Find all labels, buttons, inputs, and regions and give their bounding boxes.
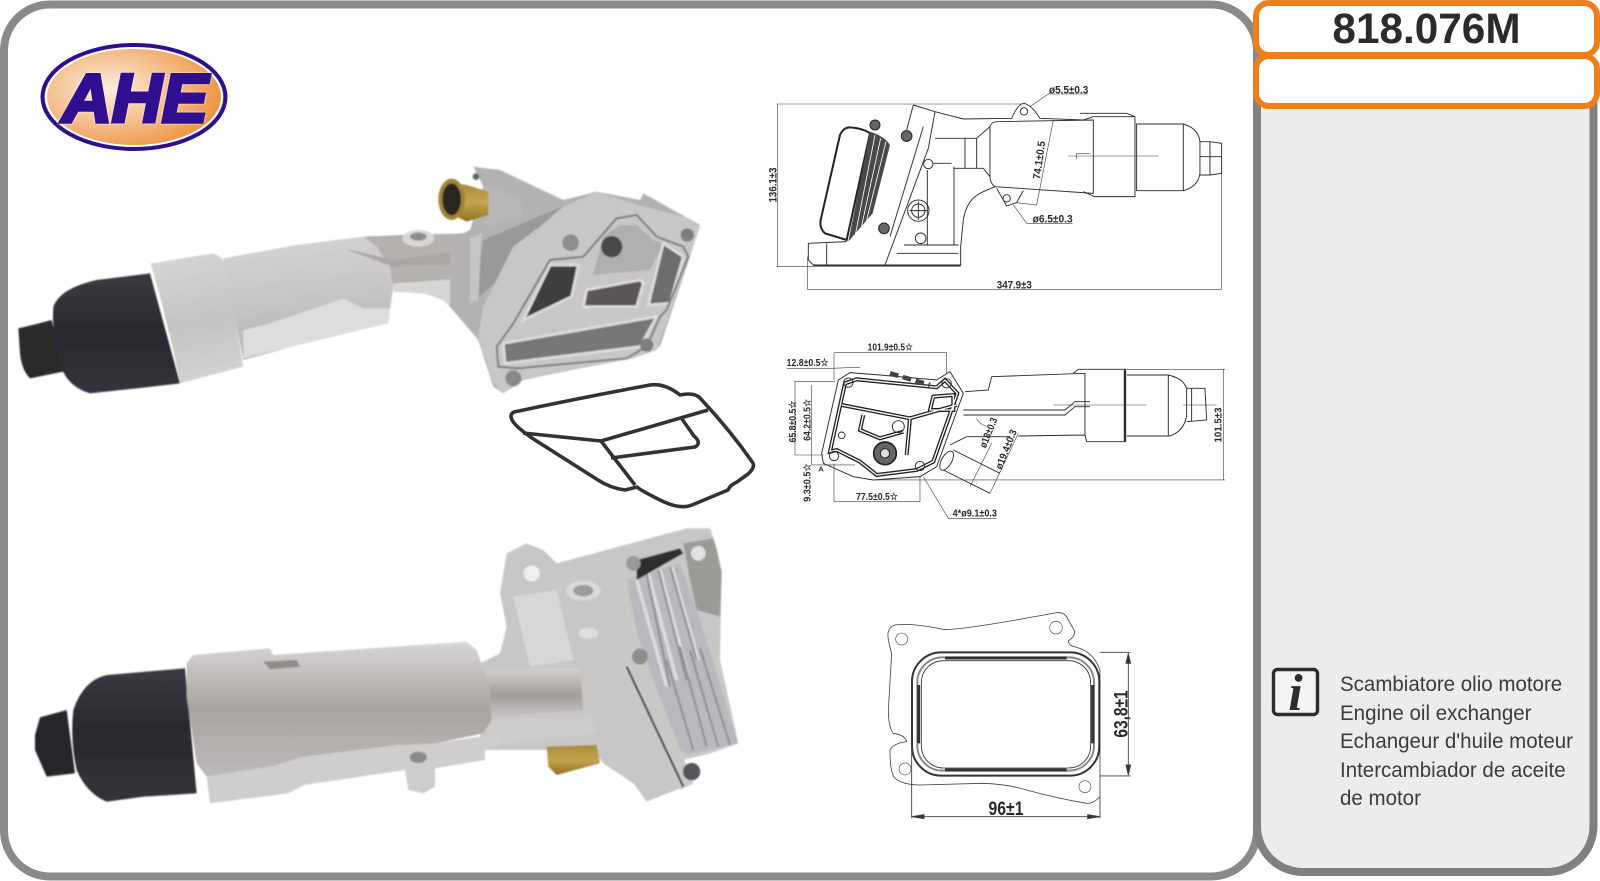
- dimension labels: ø18±0.3: [978, 416, 1000, 450]
- text block: part description: Engine oil exchanger: [1340, 702, 1531, 725]
- part number box: 818.076M: [1332, 5, 1521, 52]
- text block: part description: [1340, 673, 1573, 810]
- dimension lines: [787, 353, 1225, 518]
- dimension labels: [768, 84, 1088, 291]
- text block: part description: Intercambiador de aceite: [1340, 759, 1566, 782]
- dimension labels: 101.9±0.5☆: [868, 343, 913, 354]
- icon: information: [1274, 665, 1318, 722]
- cap and housing: [35, 642, 500, 803]
- diagram: cooler plate with dimensions: [888, 613, 1132, 820]
- panel: details: [1257, 60, 1594, 872]
- brass tube and mounting flange: [438, 167, 700, 393]
- dimension labels: 96±1: [988, 799, 1024, 820]
- cap and housing: [18, 230, 510, 393]
- photo: oil filter housing, flange side: [18, 230, 510, 393]
- text block: part description: Scambiatore olio motore: [1340, 673, 1562, 696]
- empty orange box: [1256, 56, 1597, 106]
- housing outline: [808, 103, 1222, 266]
- flange plate with gasket groove: [822, 372, 963, 480]
- part number box: [1256, 3, 1597, 55]
- photo: oil filter housing, cooler side: [35, 528, 738, 803]
- dimension labels: [787, 343, 1225, 520]
- dimension labels: 9.3±0.5☆: [803, 463, 814, 502]
- dimension labels: ø6.5±0.3: [1033, 214, 1073, 226]
- dimension labels: [988, 690, 1132, 820]
- housing outline: [937, 369, 1207, 493]
- dimension labels: 65.8±0.5☆: [788, 401, 799, 442]
- diagram: side view with dimensions: [768, 84, 1222, 291]
- dimension lines: [912, 652, 1131, 819]
- dimension labels: 77.5±0.5☆: [856, 492, 898, 503]
- dimension labels: 63,8±1: [1111, 690, 1132, 738]
- gasket: [511, 385, 753, 507]
- diagram: flange view with dimensions: [787, 343, 1225, 520]
- icon: information: i: [1288, 665, 1303, 722]
- dimension labels: 136.1±3: [768, 167, 780, 202]
- dimension labels: 64.2±0.5☆: [803, 399, 814, 441]
- dimension labels: ø19.4±0.3: [994, 428, 1020, 471]
- dimension labels: 4*ø9.1±0.3: [953, 509, 997, 520]
- mounting bracket, cooler and brass port: [480, 528, 738, 802]
- dimension labels: 101.5±3: [1214, 407, 1225, 442]
- dimension labels: 74.1±0.5: [1031, 140, 1048, 180]
- plate outline: [888, 613, 1100, 803]
- dimension labels: 12.8±0.5☆: [787, 358, 828, 369]
- dimension labels: ø5.5±0.3: [1049, 84, 1088, 96]
- text block: part description: Echangeur d'huile moteur: [1340, 730, 1573, 753]
- logo: AHE: AHE: [60, 60, 210, 137]
- dimension lines: [777, 94, 1222, 289]
- seal ring: [912, 652, 1099, 776]
- panel: product images: [4, 4, 1257, 876]
- dimension labels: 347.9±3: [997, 279, 1032, 291]
- logo: AHE: [42, 45, 226, 149]
- oil cooler stack: [820, 120, 912, 242]
- dimension labels: A: [818, 465, 824, 474]
- text block: part description: de motor: [1340, 787, 1421, 810]
